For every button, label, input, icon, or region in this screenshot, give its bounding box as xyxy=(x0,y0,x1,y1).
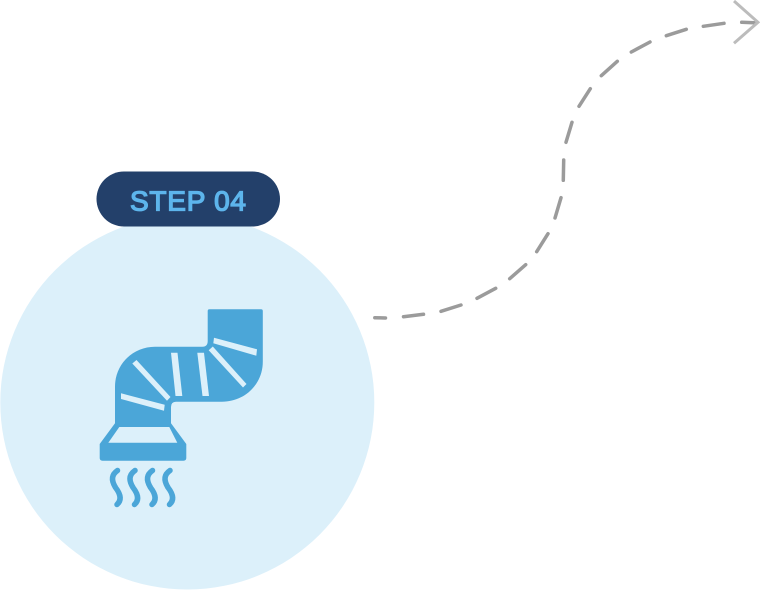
panel: light blue circle xyxy=(0,216,374,590)
hood opening xyxy=(108,427,177,443)
dashed line xyxy=(375,22,754,318)
icon: flexible duct with exhaust hood xyxy=(100,309,263,504)
duct ribs xyxy=(121,338,257,411)
duct body xyxy=(100,309,263,461)
arrowhead xyxy=(734,1,758,43)
badge label: STEP 04 xyxy=(130,186,246,216)
exhaust waves xyxy=(113,470,173,504)
step badge xyxy=(96,172,280,226)
badge pill xyxy=(96,172,280,226)
arrow: dashed curved path xyxy=(375,1,758,318)
